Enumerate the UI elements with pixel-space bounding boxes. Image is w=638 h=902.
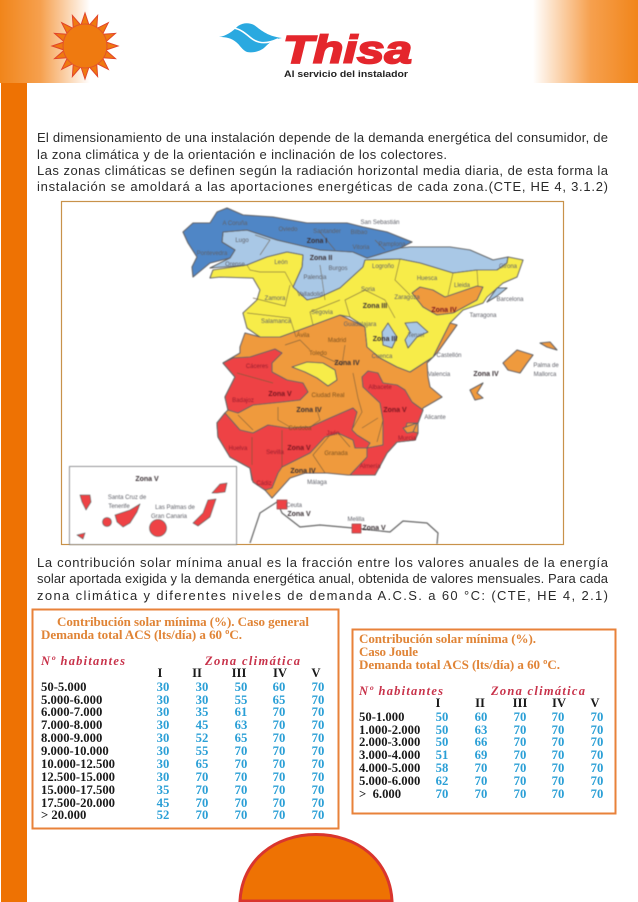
logo tagline: Al servicio del instalador — [284, 69, 409, 79]
small orange Murcia pocket — [403, 423, 417, 433]
table values: 70 — [196, 808, 208, 822]
map labels: Palma de — [533, 363, 559, 369]
table values: 50 — [436, 710, 448, 724]
table values: 65 — [235, 731, 247, 745]
map: zonas climáticas de España — [62, 202, 564, 544]
map labels: Salamanca — [261, 319, 292, 325]
map labels: Toledo — [309, 351, 328, 357]
map labels: Pamplona — [378, 242, 406, 248]
text block: contribución solar — [37, 555, 609, 603]
map labels: Lleida — [454, 283, 471, 289]
table values: 30 — [157, 757, 169, 771]
table values: 70 — [591, 748, 603, 762]
row labels: 15.000-17.500 — [41, 783, 115, 797]
map labels: Jaén — [326, 431, 340, 437]
map labels: A Coruña — [222, 221, 248, 227]
table values: 70 — [591, 723, 603, 737]
table values: 70 — [591, 761, 603, 775]
column headers: IV — [273, 666, 288, 680]
map labels: Zona V — [287, 445, 311, 452]
table values: 45 — [196, 718, 208, 732]
table values: 70 — [514, 787, 526, 801]
table values: 70 — [273, 808, 285, 822]
zone I dark blue — [183, 208, 412, 277]
map labels: Cuenca — [372, 354, 393, 360]
map labels: Logroño — [372, 264, 395, 270]
table values: 70 — [312, 731, 324, 745]
map labels: Girona — [499, 264, 518, 270]
map labels: Ciudad Real — [311, 393, 345, 399]
Canarias inset — [70, 466, 236, 544]
table values: 63 — [235, 718, 247, 732]
map labels: León — [274, 260, 288, 266]
row labels: 2.000-3.000 — [359, 735, 420, 749]
map labels: Zona IV — [473, 371, 499, 378]
map labels: Melilla — [347, 517, 365, 523]
table values: 70 — [312, 680, 324, 694]
map labels: Soria — [361, 287, 376, 293]
table values: 70 — [312, 783, 324, 797]
row labels: 7.000-8.000 — [41, 718, 102, 732]
header band right gradient — [533, 0, 638, 83]
table heading: Caso Joule — [359, 644, 418, 659]
table values: 70 — [312, 796, 324, 810]
map labels: Bilbao — [351, 230, 368, 236]
row labels: 5.000-6.000 — [359, 774, 420, 788]
table values: 62 — [436, 774, 448, 788]
table values: 70 — [552, 735, 564, 749]
axis labels: Zona climática — [204, 654, 300, 668]
table values: 50 — [235, 680, 247, 694]
table heading: Contribución solar mínima (%). Caso general — [57, 614, 309, 629]
row labels: 17.500-20.000 — [41, 796, 115, 810]
text block: intro: instalación se amoldará a las aportaciones energéticas de cada zona.(CTE, HE 4, 3.1.2) — [37, 179, 608, 194]
row labels: > 20.000 — [41, 808, 86, 822]
Menorca — [540, 342, 557, 350]
table values: 30 — [157, 680, 169, 694]
map labels: Zona II — [310, 255, 332, 262]
logo: Thisa — [219, 23, 412, 79]
column headers — [158, 666, 321, 680]
table values: 70 — [312, 705, 324, 719]
table values: 70 — [312, 744, 324, 758]
row labels: 5.000-6.000 — [41, 693, 102, 707]
table values: 70 — [436, 787, 448, 801]
table values: 70 — [273, 770, 285, 784]
table values: 70 — [514, 723, 526, 737]
row labels: > 6.000 — [359, 787, 401, 801]
table values: 70 — [312, 757, 324, 771]
map labels: Huesca — [417, 276, 438, 282]
table values: 61 — [235, 705, 247, 719]
icon: blue wave — [219, 23, 282, 52]
table values: 30 — [196, 693, 208, 707]
table values: 70 — [552, 761, 564, 775]
table values: 70 — [273, 705, 285, 719]
table values: 70 — [235, 770, 247, 784]
table values: 50 — [436, 735, 448, 749]
table values: 70 — [552, 723, 564, 737]
axis labels — [358, 684, 585, 698]
row labels: 12.500-15.000 — [41, 770, 115, 784]
table values: 70 — [514, 735, 526, 749]
column headers: I — [436, 696, 441, 710]
Melilla marker — [352, 524, 361, 533]
Ceuta marker — [277, 500, 287, 509]
map labels: Almería — [360, 464, 381, 470]
row labels — [359, 710, 420, 801]
text block: intro — [37, 130, 609, 194]
table values: 70 — [235, 808, 247, 822]
panel frame — [352, 630, 616, 814]
row labels — [41, 680, 115, 822]
map labels: Castellón — [436, 353, 462, 359]
table values: 70 — [475, 774, 487, 788]
map labels: Zaragoza — [394, 295, 420, 301]
table values: 58 — [436, 761, 448, 775]
map labels: Huelva — [229, 446, 248, 452]
column headers — [436, 696, 600, 710]
text block: contribución solar: solar aportada exigida y la demanda energética anual, obtenida de valores mensuales. Para cada — [37, 571, 609, 586]
column headers: II — [192, 666, 202, 680]
zone II light blue — [210, 230, 508, 300]
map labels: Valencia — [428, 372, 451, 378]
icon: sun — [52, 13, 118, 79]
table values: 51 — [436, 748, 448, 762]
row labels: 6.000-7.000 — [41, 705, 102, 719]
text block: contribución solar: zona climática y diferentes niveles de demanda A.C.S. a 60 °C: (CTE, HE 4, 2.1) — [37, 588, 608, 603]
table values: 55 — [235, 693, 247, 707]
light blue pocket 1 — [382, 323, 397, 348]
map labels: Zona V — [287, 511, 311, 518]
map labels: Granada — [324, 451, 348, 457]
table values: 70 — [196, 783, 208, 797]
table values: 30 — [157, 718, 169, 732]
table values: 70 — [196, 770, 208, 784]
table values: 30 — [157, 744, 169, 758]
logo wordmark: Thisa — [283, 29, 412, 72]
map labels: Orense — [225, 262, 245, 268]
map labels: Oviedo — [278, 227, 298, 233]
panel: tabla caso general — [32, 610, 338, 828]
map labels — [108, 220, 559, 532]
table values: 66 — [475, 735, 487, 749]
table values: 35 — [157, 783, 169, 797]
map regions — [70, 208, 557, 544]
map labels: Zona V — [268, 391, 292, 398]
map labels: Tenerife — [108, 504, 130, 510]
province lines — [237, 232, 478, 473]
header band left gradient — [0, 0, 90, 83]
map labels: Alicante — [424, 415, 446, 421]
table values: 60 — [475, 710, 487, 724]
map frame — [62, 202, 564, 544]
column headers: V — [590, 696, 600, 710]
red western Andalucia — [217, 408, 370, 490]
map labels: Córdoba — [288, 426, 312, 432]
text block: intro: la zona climática y de la orientación e inclinación de los colectores. — [37, 147, 447, 162]
table values: 70 — [312, 808, 324, 822]
map labels: Zamora — [265, 296, 286, 302]
map labels: Barcelona — [496, 297, 524, 303]
column headers: II — [475, 696, 485, 710]
map labels: Segovia — [311, 310, 334, 316]
axis labels — [40, 654, 300, 668]
map labels: Burgos — [328, 266, 348, 272]
table values: 70 — [312, 770, 324, 784]
map labels: Zona IV — [296, 407, 322, 414]
table values: 70 — [235, 783, 247, 797]
map labels: Mallorca — [534, 372, 557, 378]
map labels: Zona III — [373, 336, 397, 343]
table values: 70 — [591, 787, 603, 801]
table values: 52 — [196, 731, 208, 745]
map labels: Santa Cruz de — [108, 495, 147, 501]
table values: 70 — [552, 787, 564, 801]
table values — [157, 680, 324, 822]
table values: 70 — [273, 731, 285, 745]
map labels: Cádiz — [256, 481, 272, 487]
table values: 70 — [475, 787, 487, 801]
table heading — [359, 631, 560, 672]
table values: 55 — [196, 744, 208, 758]
map labels: Badajoz — [232, 398, 254, 404]
table values — [436, 710, 603, 801]
table values: 70 — [273, 744, 285, 758]
map labels: Ávila — [296, 332, 310, 339]
table values: 70 — [514, 748, 526, 762]
table values: 70 — [235, 757, 247, 771]
panel frame — [32, 610, 338, 828]
table values: 70 — [552, 710, 564, 724]
table heading: Contribución solar mínima (%). — [359, 631, 536, 646]
map labels: Málaga — [307, 480, 327, 486]
map labels: Las Palmas de — [155, 505, 196, 511]
Ibiza — [470, 383, 483, 400]
zone III yellow — [210, 252, 523, 372]
table values: 35 — [196, 705, 208, 719]
table values: 30 — [157, 693, 169, 707]
table values: 70 — [591, 774, 603, 788]
table values: 70 — [273, 757, 285, 771]
row labels: 1.000-2.000 — [359, 723, 420, 737]
row labels: 3.000-4.000 — [359, 748, 420, 762]
map labels: San Sebastián — [360, 220, 400, 226]
table values: 70 — [514, 710, 526, 724]
table values: 60 — [273, 680, 285, 694]
map labels: Guadalajara — [344, 322, 377, 328]
map labels: Palencia — [303, 275, 327, 281]
row labels: 50-5.000 — [41, 680, 86, 694]
table values: 63 — [475, 723, 487, 737]
zone IV orange mainland — [217, 315, 457, 498]
table values: 70 — [273, 718, 285, 732]
map labels: Zona I — [307, 238, 327, 245]
map labels: Valladolid — [297, 292, 323, 298]
map labels: Zona IV — [334, 360, 360, 367]
table values: 70 — [235, 796, 247, 810]
table values: 70 — [475, 761, 487, 775]
row labels: 9.000-10.000 — [41, 744, 109, 758]
table values: 70 — [312, 718, 324, 732]
table values: 70 — [273, 796, 285, 810]
table values: 30 — [157, 731, 169, 745]
table values: 70 — [514, 761, 526, 775]
column headers: IV — [552, 696, 567, 710]
map labels: Sevilla — [266, 450, 284, 456]
map labels: Lugo — [235, 238, 249, 244]
column headers: III — [513, 696, 527, 710]
red south east — [350, 371, 423, 475]
Mallorca — [503, 350, 533, 373]
map labels: Zona V — [383, 407, 407, 414]
map labels: Teruel — [408, 333, 424, 339]
text block: intro: Las zonas climáticas se definen según la radiación horizontal media diaria, de esta forma la — [37, 163, 609, 178]
north Africa coast — [250, 502, 438, 544]
table heading: Demanda total ACS (lts/día) a 60 ºC. — [41, 627, 242, 642]
row labels: 8.000-9.000 — [41, 731, 102, 745]
yellow pocket — [292, 362, 337, 386]
Ebro orange — [412, 286, 483, 315]
row labels: 10.000-12.500 — [41, 757, 115, 771]
text block: intro: El dimensionamiento de una instalación depende de la demanda energética del consumidor, de — [37, 130, 608, 145]
column headers: V — [311, 666, 321, 680]
table values: 30 — [196, 680, 208, 694]
axis labels: Nº habitantes — [40, 654, 125, 668]
left orange stripe — [1, 83, 27, 902]
table values: 45 — [157, 796, 169, 810]
table values: 70 — [273, 783, 285, 797]
red Extremadura — [223, 349, 308, 413]
text block: contribución solar: La contribución solar mínima anual es la fracción entre los valores anuales de la energía — [37, 555, 609, 570]
map labels: Vitoria — [353, 245, 370, 251]
panel: tabla caso Joule — [352, 630, 616, 814]
row labels: 50-1.000 — [359, 710, 404, 724]
table values: 70 — [591, 710, 603, 724]
table values: 52 — [157, 808, 169, 822]
table values: 70 — [514, 774, 526, 788]
table values: 70 — [235, 744, 247, 758]
map labels: Ceuta — [286, 503, 303, 509]
table values: 30 — [157, 705, 169, 719]
table values: 65 — [273, 693, 285, 707]
table heading: Demanda total ACS (lts/día) a 60 ºC. — [359, 657, 560, 672]
map labels: Madrid — [328, 338, 346, 344]
column headers: III — [232, 666, 246, 680]
map labels: Zona V — [362, 525, 386, 532]
map labels: Tarragona — [469, 313, 497, 319]
light blue pocket 2 — [405, 322, 428, 348]
table values: 65 — [196, 757, 208, 771]
row labels: 4.000-5.000 — [359, 761, 420, 775]
table values: 70 — [552, 774, 564, 788]
table values: 50 — [436, 723, 448, 737]
column headers: I — [158, 666, 163, 680]
icon: half sun at bottom — [240, 834, 392, 901]
table values: 70 — [552, 748, 564, 762]
map labels: Pontevedra — [197, 251, 228, 257]
table values: 69 — [475, 748, 487, 762]
map labels: Zona V — [135, 476, 159, 483]
map labels: Santander — [313, 229, 341, 235]
map labels: Zona III — [363, 303, 387, 310]
axis labels: Nº habitantes — [358, 684, 443, 698]
map labels: Gran Canaria — [151, 514, 188, 520]
table heading — [41, 614, 309, 642]
table values: 70 — [312, 693, 324, 707]
axis labels: Zona climática — [490, 684, 585, 698]
map labels: Zona IV — [431, 307, 457, 314]
table values: 30 — [157, 770, 169, 784]
map labels: Cáceres — [246, 364, 268, 370]
map labels: Zona IV — [290, 468, 316, 475]
table values: 70 — [196, 796, 208, 810]
map labels: Murcia — [398, 436, 417, 442]
Barcelona light blue — [487, 288, 507, 302]
map labels: Albacete — [368, 385, 392, 391]
table values: 70 — [591, 735, 603, 749]
